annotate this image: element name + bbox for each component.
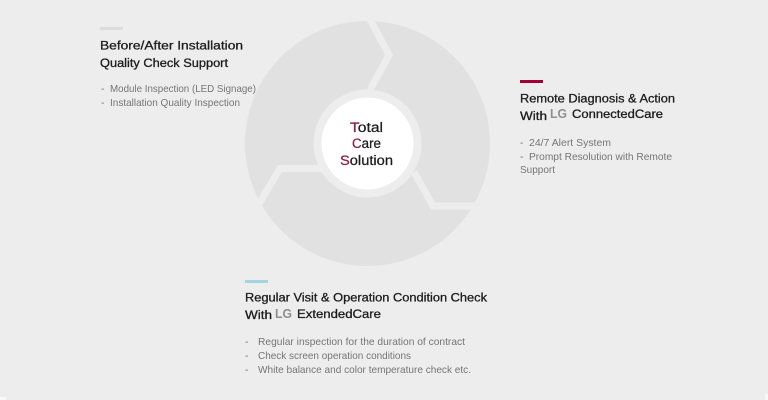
list: remote diagnosis: - xyxy=(520,151,524,163)
heading: remote diagnosis: With xyxy=(520,109,547,123)
heading: regular visit: With xyxy=(245,308,272,322)
list: remote diagnosis: - xyxy=(520,137,524,149)
list: before/after installation: - xyxy=(101,83,105,95)
heading: before/after installation: Quality Check Support xyxy=(100,56,229,70)
list: regular visit xyxy=(245,336,471,376)
center circle xyxy=(322,98,414,190)
center label: Total Care Solution: Solution xyxy=(340,153,393,168)
cycle diagram xyxy=(245,13,490,266)
list: regular visit: Regular inspection for the duration of contract xyxy=(258,336,465,348)
center label: Total Care Solution xyxy=(340,120,393,168)
heading: remote diagnosis: LG xyxy=(550,106,567,121)
list: remote diagnosis: Support xyxy=(520,164,555,176)
list: before/after installation: Module Inspection (LED Signage) xyxy=(110,83,256,95)
list: regular visit: Check screen operation conditions xyxy=(258,350,411,362)
list: regular visit: - xyxy=(245,364,249,376)
list: remote diagnosis: 24/7 Alert System xyxy=(529,137,611,149)
heading: regular visit xyxy=(245,290,488,322)
heading: regular visit: LG xyxy=(275,306,292,321)
panel: regular visit xyxy=(245,280,488,376)
heading: remote diagnosis: Remote Diagnosis & Action xyxy=(520,92,675,106)
list: regular visit: White balance and color temperature check etc. xyxy=(258,364,471,376)
heading: regular visit: Regular Visit & Operation Condition Check xyxy=(245,290,488,304)
list: regular visit: - xyxy=(245,350,249,362)
heading: before/after installation xyxy=(100,38,243,70)
list: before/after installation xyxy=(101,83,256,109)
heading: before/after installation: Before/After Installation xyxy=(100,38,243,52)
panel: before/after installation xyxy=(100,27,256,109)
heading: remote diagnosis: ConnectedCare xyxy=(572,107,663,121)
list: remote diagnosis xyxy=(520,137,672,176)
list: before/after installation: Installation Quality Inspection xyxy=(110,97,240,109)
list: before/after installation: - xyxy=(101,97,105,109)
heading: regular visit: ExtendedCare xyxy=(297,307,381,321)
center label: Total Care Solution: Care xyxy=(352,136,381,151)
panel: remote diagnosis xyxy=(520,80,675,176)
center label: Total Care Solution: Total xyxy=(350,120,383,135)
heading: remote diagnosis xyxy=(520,92,675,123)
list: regular visit: - xyxy=(245,336,249,348)
list: remote diagnosis: Prompt Resolution with Remote xyxy=(529,151,672,163)
